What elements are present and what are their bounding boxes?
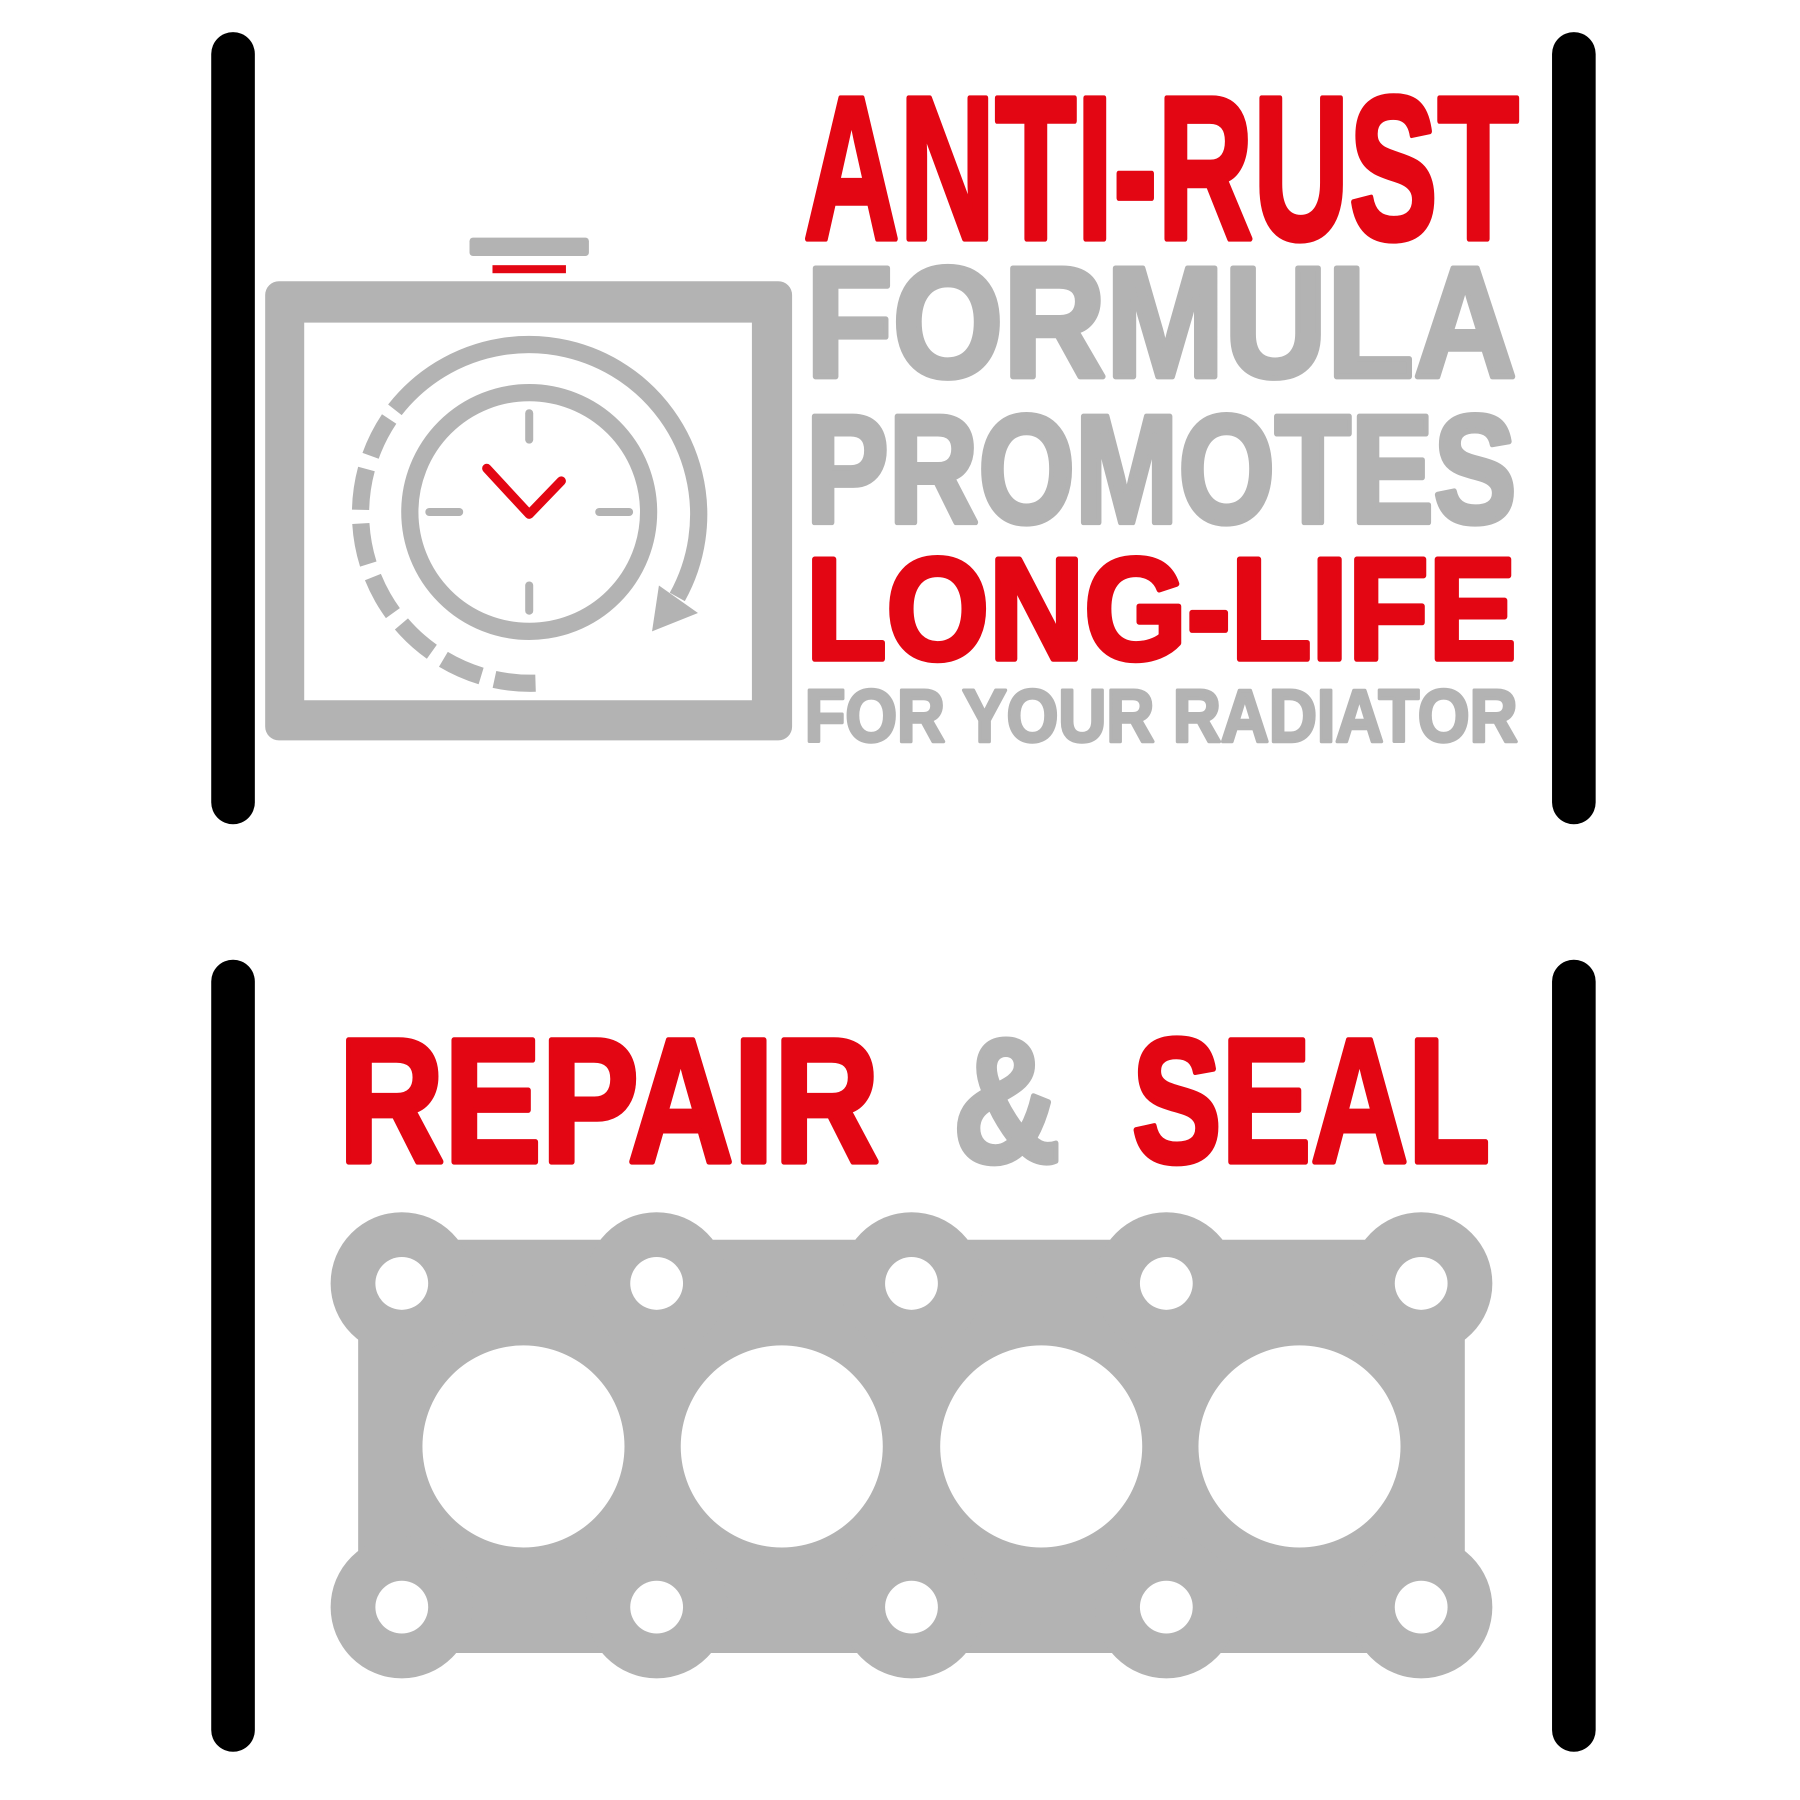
- heading: LONG-LIFE: LONG-LIFE: [806, 528, 1516, 690]
- bar: bottom left: [211, 960, 255, 1752]
- bar: top right: [1552, 32, 1596, 824]
- icon: radiator with clock: [265, 238, 792, 740]
- bar: top left: [211, 32, 255, 824]
- heading: PROMOTES: PROMOTES: [806, 383, 1516, 555]
- heading: REPAIR & SEAL: REPAIR: [339, 1003, 879, 1200]
- icon: gasket: [331, 1212, 1492, 1678]
- heading: REPAIR & SEAL: [339, 1003, 1490, 1200]
- heading: FORMULA: FORMULA: [806, 236, 1516, 411]
- subheading: FOR YOUR RADIATOR: FOR YOUR RADIATOR: [805, 674, 1518, 758]
- bar: bottom right: [1552, 960, 1596, 1752]
- heading: REPAIR & SEAL: &: [953, 1003, 1061, 1200]
- heading: REPAIR & SEAL: SEAL: [1132, 1003, 1490, 1200]
